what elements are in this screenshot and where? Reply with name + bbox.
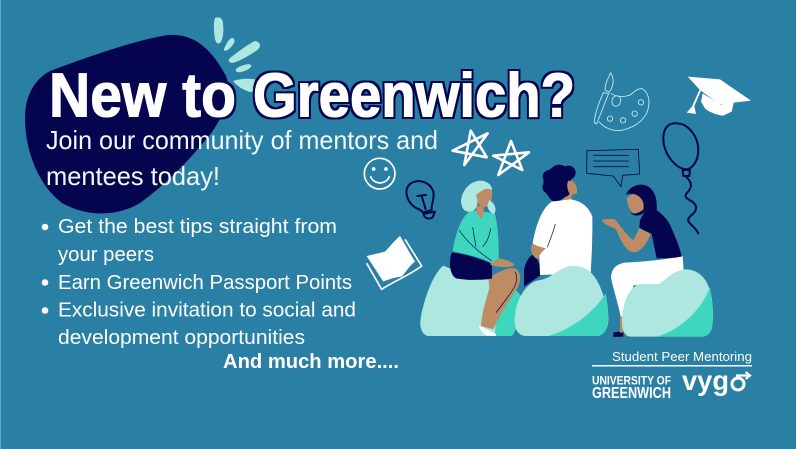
icon: light bulb: [406, 181, 435, 219]
icon: balloon: [663, 123, 698, 233]
university of greenwich logo: [592, 374, 671, 402]
bullet list: development opportunities: [58, 326, 305, 349]
person: seated right: [611, 256, 684, 337]
and much more: And much more....: [223, 351, 399, 373]
student peer mentoring label: Student Peer Mentoring: [612, 349, 752, 364]
title: New to: [49, 62, 236, 130]
university of greenwich logo: UNIVERSITY OF: [592, 374, 671, 388]
icon: speech bubble: [587, 149, 640, 187]
beanbag: right: [622, 269, 713, 337]
icon: paint palette: [594, 73, 649, 131]
subtitle: Join our community of mentors and: [46, 125, 438, 155]
bullet list: Exclusive invitation to social and: [58, 298, 356, 322]
subtitle: mentees today!: [46, 161, 220, 191]
icon: open book: [367, 236, 422, 289]
vygo logo: vyg: [682, 365, 729, 396]
person: seated left: [450, 181, 520, 336]
beanbag: centre: [515, 266, 608, 336]
icon: graduation cap: [687, 77, 751, 116]
icon: smiley: [364, 158, 395, 189]
accent burst: [214, 17, 263, 92]
footer logos: [592, 349, 752, 402]
title: Greenwich?: [253, 62, 575, 130]
person: centre, seen from behind: [524, 165, 592, 287]
beanbag: left: [420, 266, 521, 336]
bullet list: Earn Greenwich Passport Points: [58, 271, 352, 294]
subtitle: [46, 125, 438, 191]
title: [49, 62, 575, 130]
bullet list: Get the best tips straight from: [58, 215, 337, 238]
bullet list: your peers: [58, 243, 154, 266]
navy blob behind title: [25, 35, 228, 214]
illustration: three people on beanbags: [420, 165, 713, 337]
university of greenwich logo: GREENWICH: [592, 385, 671, 402]
icon: stars: [453, 131, 529, 175]
bullet list: [42, 215, 356, 349]
